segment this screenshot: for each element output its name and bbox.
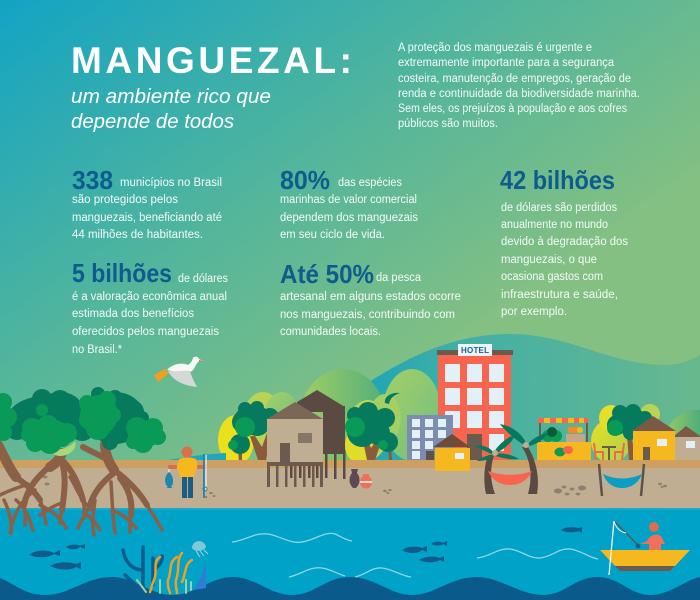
title: MANGUEZAL: — [71, 40, 352, 81]
market stall — [537, 418, 591, 460]
stat: 42 bilhões: por exemplo. — [501, 306, 567, 318]
stat: 42 bilhões: 42 bilhões — [500, 165, 615, 195]
intro paragraph: Sem eles, os prejuízos à população e aos cofres — [398, 103, 627, 115]
stat: 5 bilhões — [72, 258, 228, 356]
intro paragraph: públicos são muitos. — [398, 118, 498, 130]
tree right of stilt house — [345, 393, 400, 460]
stat: até 50%: comunidades locais. — [280, 326, 381, 338]
stat: até 50%: da pesca — [376, 272, 422, 284]
stat: 80%: das espécies — [338, 177, 402, 189]
table and chairs — [594, 443, 624, 460]
intro paragraph — [398, 42, 640, 130]
stat: 80%: marinhas de valor comercial — [280, 194, 417, 206]
shoreline and sand — [0, 460, 700, 508]
fish school — [29, 527, 582, 570]
stat: 42 bilhões: anualmente no mundo — [501, 219, 608, 231]
stat: 5 bilhões: estimada dos benefícios — [72, 308, 194, 320]
intro paragraph: costeira, manutenção de empregos, geração de — [398, 73, 631, 85]
stat: 80%: 80% — [280, 165, 330, 195]
stat: 338 municípios: 338 — [72, 165, 113, 195]
stat: até 50% — [280, 259, 461, 338]
yellow house front — [435, 460, 470, 471]
pebbles — [42, 476, 667, 498]
subtitle — [71, 86, 271, 133]
stat: 42 bilhões: infraestrutura e saúde, — [501, 289, 618, 301]
stat: 5 bilhões: oferecidos pelos manguezais — [72, 326, 219, 338]
stat: 338 municípios: 44 milhões de habitantes. — [72, 229, 203, 241]
tree left of stilt house — [228, 401, 279, 463]
stat: 80% — [280, 165, 418, 241]
hotel — [437, 344, 513, 463]
stat: 338 municípios: manguezais, beneficiando até — [72, 212, 222, 224]
boat with fisher — [600, 521, 690, 575]
intro paragraph: renda e continuidade da biodiversidade marinha. — [398, 88, 640, 100]
mangrove roots — [0, 444, 162, 535]
stat: 80%: dependem dos manguezais — [280, 212, 418, 224]
gray building — [407, 415, 453, 461]
bird — [154, 357, 203, 387]
stat: 80%: em seu ciclo de vida. — [280, 229, 385, 241]
subtitle: um ambiente rico que — [71, 86, 271, 108]
stat: 338 municípios — [72, 165, 222, 241]
waves on water surface — [232, 533, 598, 577]
subtitle: depende de todos — [71, 111, 234, 133]
stat: 42 bilhões: de dólares são perdidos — [501, 202, 617, 214]
hotel: HOTEL — [461, 346, 489, 355]
right houses — [632, 416, 700, 461]
stat: 42 bilhões: manguezais, o que — [501, 254, 597, 266]
stat: 5 bilhões: no Brasil.* — [72, 344, 122, 356]
small yellow house — [433, 434, 470, 471]
stilt house — [267, 390, 346, 487]
stat: 42 bilhões: ocasiona gastos com — [501, 271, 603, 283]
stat: até 50%: nos manguezais, contribuindo com — [280, 309, 455, 321]
water — [0, 508, 700, 600]
intro paragraph: A proteção dos manguezais é urgente e — [398, 42, 592, 54]
stat: até 50%: artesanal em alguns estados ocorre — [280, 291, 461, 303]
jellyfish — [192, 541, 208, 557]
stat: 42 bilhões: devido à degradação dos — [501, 236, 628, 248]
stat: 5 bilhões: é a valoração econômica anual — [72, 291, 227, 303]
stat: 42 bilhões — [500, 165, 628, 318]
stat: até 50%: Até 50% — [280, 259, 374, 289]
fisherman — [165, 446, 207, 498]
stat: 5 bilhões: 5 bilhões — [72, 258, 172, 288]
intro paragraph: extremamente importante para a segurança — [398, 57, 615, 69]
stat: 5 bilhões: de dólares — [178, 273, 228, 285]
bottom wave — [0, 577, 700, 600]
mangrove canopy — [0, 387, 166, 456]
blue hammock — [599, 464, 644, 496]
yellow blob behind right tree — [591, 404, 660, 463]
stat: 338 municípios: municípios no Brasil — [120, 177, 222, 189]
coral — [123, 547, 206, 593]
palm trees with hammock — [475, 424, 548, 494]
right tree — [607, 404, 652, 460]
pottery — [349, 469, 372, 488]
background hills — [168, 334, 700, 475]
stat: 338 municípios: são protegidos pelos — [72, 194, 178, 206]
